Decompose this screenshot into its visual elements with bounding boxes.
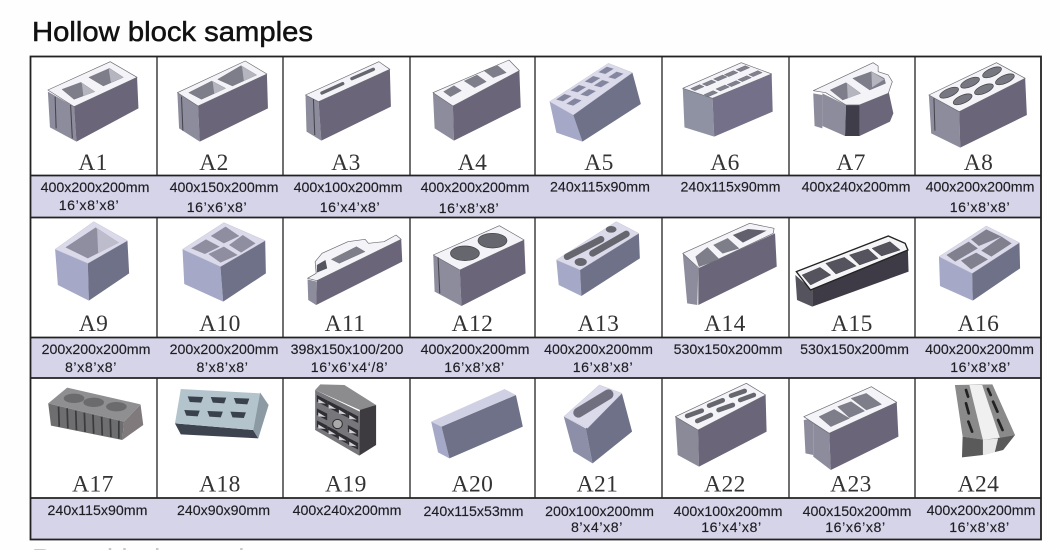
label: A24: A24 xyxy=(958,472,999,498)
dimensions: A8: 16’x8’x8’ xyxy=(950,200,1010,216)
dimensions: A14: 530x150x200mm xyxy=(674,342,782,358)
cell: A16 xyxy=(915,218,1041,378)
icon: block A13 xyxy=(556,222,640,296)
dimensions: A3: 400x100x200mm xyxy=(294,180,402,196)
icon: block A14 xyxy=(683,223,777,305)
dimensions: A10: 200x200x200mm xyxy=(170,342,278,358)
dimensions: A12: 400x200x200mm xyxy=(421,342,529,358)
label: A4: A4 xyxy=(458,150,487,176)
dimensions: A8: 400x200x200mm xyxy=(926,180,1034,196)
icon: block A15 xyxy=(795,236,909,307)
dimensions: A10: 8’x8’x8’ xyxy=(196,360,249,376)
icon: block A3 xyxy=(305,62,391,141)
dimensions: A21 xyxy=(545,504,654,536)
label: A13: A13 xyxy=(578,311,619,337)
label: A3: A3 xyxy=(331,150,361,176)
cell: A24 xyxy=(915,378,1041,539)
dimensions: A17: 240x115x90mm xyxy=(48,503,147,519)
icon: block A20 xyxy=(431,389,523,458)
cell: A11 xyxy=(283,218,410,378)
label: A23: A23 xyxy=(830,472,872,498)
label: A6: A6 xyxy=(710,150,740,176)
cell: A23 xyxy=(789,378,915,539)
cell: A8 xyxy=(915,56,1041,217)
dimensions: A19: 400x240x200mm xyxy=(293,503,401,519)
cell: A2 xyxy=(157,56,283,217)
dimensions: A9: 200x200x200mm xyxy=(42,342,150,358)
dimensions: A24: 16’x8’x8’ xyxy=(949,520,1010,536)
cell: A22 xyxy=(662,378,789,539)
icon: block A11 xyxy=(308,235,402,305)
dimensions: A4 xyxy=(421,180,529,217)
dimensions: A22: 16’x4’x8’ xyxy=(701,520,762,536)
cell: A12 xyxy=(410,218,535,378)
cell: A14 xyxy=(662,218,789,378)
dimensions: A10 xyxy=(170,342,278,376)
label: A12: A12 xyxy=(452,311,493,337)
dimensions: A2 xyxy=(170,180,278,216)
dimensions: A3: 16’x4’x8’ xyxy=(320,200,380,216)
icon: block A18 xyxy=(175,389,269,438)
dimensions: A2: 16’x6’x8’ xyxy=(187,200,247,216)
dimensions: A12 xyxy=(421,342,529,376)
dimensions: A15: 530x150x200mm xyxy=(800,342,909,358)
dimensions: A3 xyxy=(294,180,402,216)
dimensions: A16: 16’x8’x8’ xyxy=(950,360,1011,376)
dimensions: A4: 16’x8’x8’ xyxy=(439,201,499,217)
dimensions: A11: 398x150x100/200 xyxy=(291,342,404,358)
cell: A20 xyxy=(410,378,535,539)
icon: block A17 xyxy=(48,388,143,440)
dimensions: A13: 16’x8’x8’ xyxy=(573,360,633,376)
label: A17: A17 xyxy=(72,472,114,498)
dimensions: A22 xyxy=(674,504,782,536)
dimensions: A18: 240x90x90mm xyxy=(177,503,270,519)
dimensions: A5: 240x115x90mm xyxy=(550,180,650,196)
dimensions: A1: 16’x8’x8’ xyxy=(59,198,119,214)
icon: block A22 xyxy=(675,383,767,467)
dimensions: A23 xyxy=(803,504,911,536)
label: A9: A9 xyxy=(79,311,108,337)
dimensions: A16: 400x200x200mm xyxy=(925,342,1034,358)
label: A19: A19 xyxy=(325,472,367,498)
dimensions: A11: 16’x6’x4‘/8’ xyxy=(311,360,388,376)
cell: A10 xyxy=(157,218,283,378)
page title: Hollow block samples xyxy=(32,16,313,47)
label: A5: A5 xyxy=(584,150,614,176)
label: A20: A20 xyxy=(452,472,493,498)
icon: block A24 xyxy=(955,384,1015,457)
dimensions: A13 xyxy=(544,342,653,376)
cell: A3 xyxy=(283,56,410,217)
dimensions: A21: 200x100x200mm xyxy=(545,504,654,520)
label: A2: A2 xyxy=(199,150,229,176)
dimensions: A13: 400x200x200mm xyxy=(544,342,653,358)
icon: block A16 xyxy=(939,226,1020,301)
icon: block A8 xyxy=(929,63,1027,148)
dimensions: A24: 400x200x200mm xyxy=(927,503,1035,519)
cell: A19 xyxy=(283,378,410,539)
dimensions: A16 xyxy=(925,342,1034,376)
dimensions: A8 xyxy=(926,180,1034,216)
icon: block A10 xyxy=(183,223,266,302)
cell: A15 xyxy=(789,218,915,378)
dimensions: A6: 240x115x90mm xyxy=(681,180,780,196)
cell: A1 xyxy=(30,56,157,217)
dimensions: A21: 8’x4’x8’ xyxy=(571,520,623,536)
icon: block A19 xyxy=(315,384,376,456)
icon: block A6 xyxy=(683,63,773,137)
cell: A9 xyxy=(30,218,157,378)
dimensions: A9 xyxy=(42,342,150,376)
label: A14: A14 xyxy=(704,311,746,337)
dimensions: A11 xyxy=(291,342,404,376)
dimensions: A1: 400x200x200mm xyxy=(41,180,149,196)
cell: A6 xyxy=(662,56,789,217)
label: A11: A11 xyxy=(325,311,365,337)
icon: block A12 xyxy=(433,226,526,306)
icon: block A7 xyxy=(813,63,893,136)
icon: block A2 xyxy=(177,61,268,142)
dimensions: A24 xyxy=(927,503,1035,536)
cell: A4 xyxy=(410,56,535,217)
label: A21: A21 xyxy=(577,472,618,498)
dimensions: A22: 400x100x200mm xyxy=(674,504,782,520)
label: A15: A15 xyxy=(831,311,873,337)
icon: block A23 xyxy=(804,387,898,470)
label: A7: A7 xyxy=(836,150,866,176)
label: A18: A18 xyxy=(199,472,241,498)
icon: block A5 xyxy=(550,63,641,142)
icon: block A9 xyxy=(55,222,129,301)
dimensions: A2: 400x150x200mm xyxy=(170,180,278,196)
dimensions: A12: 16’x8’x8’ xyxy=(444,360,505,376)
cell: A18 xyxy=(157,378,283,539)
dimensions: A20: 240x115x53mm xyxy=(424,504,523,520)
label: A22: A22 xyxy=(704,472,746,498)
dimensions: A9: 8’x8’x8’ xyxy=(65,360,117,376)
icon: block A1 xyxy=(48,62,138,142)
label: A16: A16 xyxy=(958,311,999,337)
dimensions: A23: 16’x6’x8’ xyxy=(825,520,886,536)
label: A10: A10 xyxy=(199,311,241,337)
label: A8: A8 xyxy=(964,150,993,176)
icon: block A21 xyxy=(564,385,632,463)
dimensions: A23: 400x150x200mm xyxy=(803,504,911,520)
dimensions: A7: 400x240x200mm xyxy=(802,180,910,196)
cell: A21 xyxy=(535,378,662,539)
cell: A13 xyxy=(535,218,662,378)
cell: A5 xyxy=(535,56,662,217)
label: A1: A1 xyxy=(78,150,108,176)
dimensions: A4: 400x200x200mm xyxy=(421,180,529,196)
dimensions: A1 xyxy=(41,180,149,214)
cell: A7 xyxy=(789,56,915,217)
icon: block A4 xyxy=(433,60,521,141)
cell: A17 xyxy=(30,378,157,539)
